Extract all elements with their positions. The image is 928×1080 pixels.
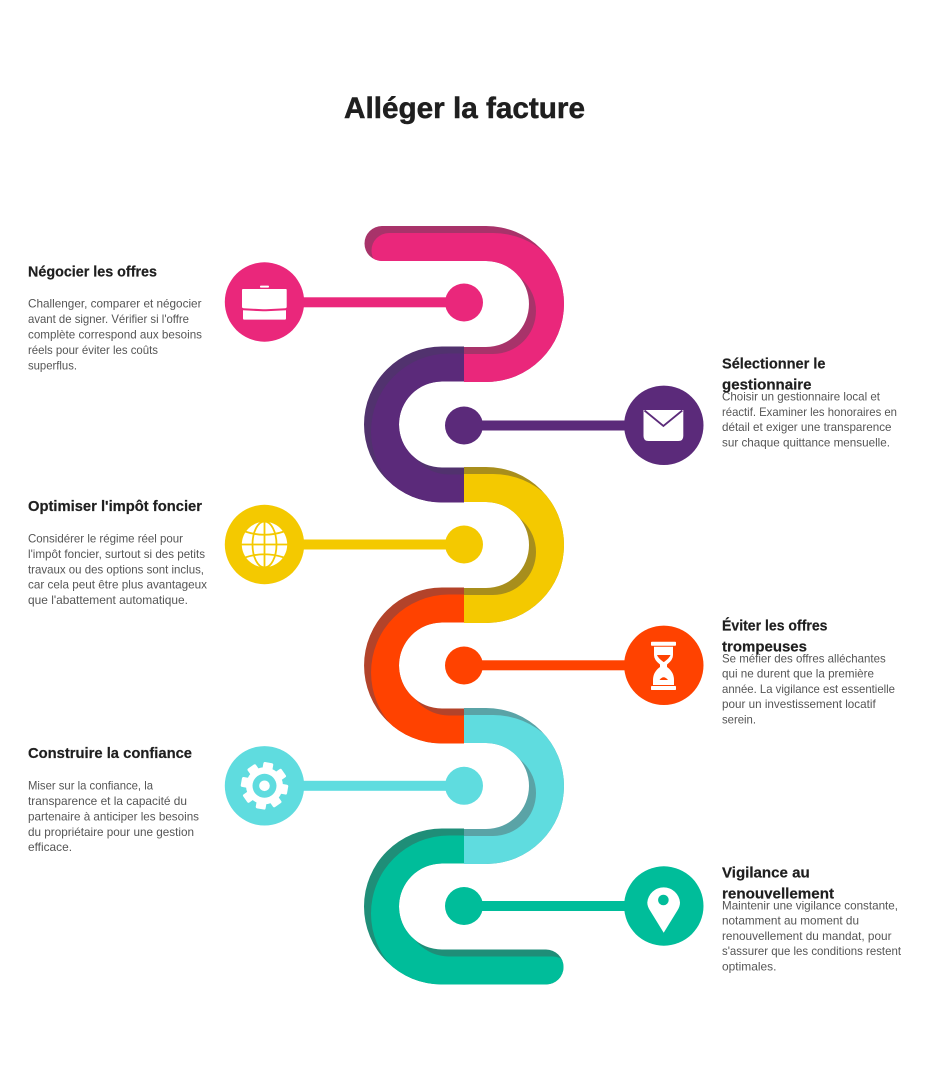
body: efficace. — [28, 840, 72, 854]
heading: trompeuses — [722, 639, 807, 655]
step 6 connector and icon: map pin — [445, 866, 704, 946]
heading: Négocier les offres — [28, 265, 157, 281]
body: réels pour éviter les coûts — [28, 343, 158, 357]
body — [722, 898, 902, 973]
heading — [722, 617, 828, 655]
step 6 text: vigilance au renouvellement — [722, 866, 902, 973]
heading — [722, 356, 826, 393]
body — [28, 297, 202, 372]
step 1 connector and icon: briefcase — [225, 262, 483, 342]
body — [28, 532, 207, 607]
body: du propriétaire pour une gestion — [28, 825, 194, 839]
body: réactif. Examiner les honoraires en — [722, 405, 897, 419]
body: sur chaque quittance mensuelle. — [722, 435, 890, 449]
step 3 connector and icon: globe — [225, 505, 483, 584]
body: l'impôt foncier, surtout si des petits — [28, 547, 205, 561]
heading: Éviter les offres — [722, 617, 828, 634]
body: détail et exiger une transparence — [722, 420, 892, 434]
body: s'assurer que les conditions restent — [722, 944, 902, 958]
body: qui ne durent que la première — [722, 667, 874, 681]
title: Alléger la facture — [344, 92, 585, 125]
heading: renouvellement — [722, 886, 834, 902]
body: pour un investissement locatif — [722, 697, 876, 711]
step 2 connector and icon: envelope — [445, 386, 704, 465]
path segment: pink — [364, 226, 571, 389]
path segment: orange — [364, 588, 464, 744]
path segment: green — [364, 828, 570, 992]
body — [28, 779, 199, 854]
step 4 text: éviter les offres trompeuses — [722, 617, 895, 726]
heading: gestionnaire — [722, 377, 812, 393]
step 1 text: négocier les offres — [28, 265, 202, 372]
path segment: light teal — [464, 708, 564, 864]
body — [722, 390, 897, 449]
heading: Optimiser l'impôt foncier — [28, 499, 202, 515]
body: partenaire à anticiper les besoins — [28, 809, 199, 823]
step 2 text: sélectionner le gestionnaire — [722, 356, 897, 449]
body: Considérer le régime réel pour — [28, 532, 183, 546]
body: avant de signer. Vérifier si l'offre — [28, 312, 189, 326]
body: Se méfier des offres alléchantes — [722, 651, 886, 665]
step 4 connector and icon: hourglass — [445, 626, 704, 705]
body: complète correspond aux besoins — [28, 328, 202, 342]
body: serein. — [722, 712, 756, 726]
heading: Vigilance au — [722, 866, 810, 882]
heading: Construire la confiance — [28, 746, 192, 762]
heading — [722, 866, 834, 902]
step 5 connector and icon: gear — [225, 746, 483, 826]
body: Choisir un gestionnaire local et — [722, 390, 881, 404]
body: car cela peut être plus avantageux — [28, 578, 207, 592]
path segment: yellow — [464, 467, 564, 623]
body: renouvellement du mandat, pour — [722, 929, 892, 943]
body: que l'abattement automatique. — [28, 593, 188, 607]
path segment: purple — [364, 346, 464, 502]
body: année. La vigilance est essentielle — [722, 682, 895, 696]
body: travaux ou des options sont inclus, — [28, 562, 204, 576]
winding path — [364, 226, 571, 992]
heading: Sélectionner le — [722, 356, 826, 372]
body: Maintenir une vigilance constante, — [722, 898, 898, 912]
step 3 text: optimiser l'impôt foncier — [28, 499, 207, 607]
body: Challenger, comparer et négocier — [28, 297, 202, 311]
body: optimales. — [722, 959, 776, 973]
body: notamment au moment du — [722, 914, 859, 928]
body: transparence et la capacité du — [28, 794, 187, 808]
step 5 text: construire la confiance — [28, 746, 199, 854]
body: Miser sur la confiance, la — [28, 779, 153, 793]
body: superflus. — [28, 358, 77, 372]
body — [722, 651, 895, 726]
